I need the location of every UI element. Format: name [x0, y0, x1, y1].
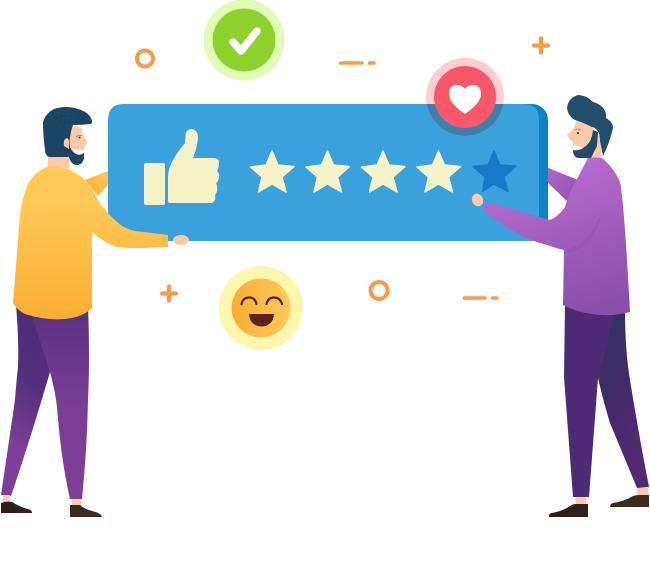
decoration: plus bottom left [162, 286, 176, 300]
ankles [3, 495, 81, 506]
beard [573, 130, 598, 158]
yellow sweater [13, 166, 168, 319]
face [567, 118, 594, 155]
decoration: ring top left [137, 50, 153, 66]
decoration: ring bottom [370, 282, 388, 299]
back leg [598, 310, 649, 488]
badge: check mark [204, 0, 284, 80]
hair [567, 95, 613, 156]
left man [1, 107, 189, 517]
shoes [549, 495, 649, 517]
shoes [1, 502, 102, 517]
left hand [173, 235, 189, 245]
badge: smiling face [219, 266, 303, 350]
right hand [470, 192, 485, 208]
right man back arm [546, 167, 578, 203]
decoration: plus top right [534, 38, 548, 52]
icon: star 1 [250, 151, 294, 192]
face [66, 126, 87, 158]
back leg [1, 305, 50, 496]
hair stubble [54, 116, 84, 128]
left man back arm [85, 171, 108, 196]
sleeve shadow [564, 214, 602, 254]
neck [586, 135, 602, 165]
purple sweater [483, 158, 630, 315]
decoration: dash bottom [464, 296, 497, 300]
neck [48, 150, 69, 175]
icon: thumbs up [144, 129, 219, 205]
hair and beard [43, 107, 92, 165]
icon: star 3 [362, 151, 405, 192]
front leg [30, 305, 89, 499]
icon: empty blue star [473, 151, 516, 192]
ankles [576, 488, 648, 505]
front leg [564, 303, 615, 497]
right man [470, 95, 649, 517]
rating board [108, 104, 548, 241]
icon: star 2 [306, 151, 350, 192]
badge: heart [426, 58, 504, 136]
decoration: dash top [340, 61, 374, 65]
icon: star 4 [417, 151, 460, 192]
